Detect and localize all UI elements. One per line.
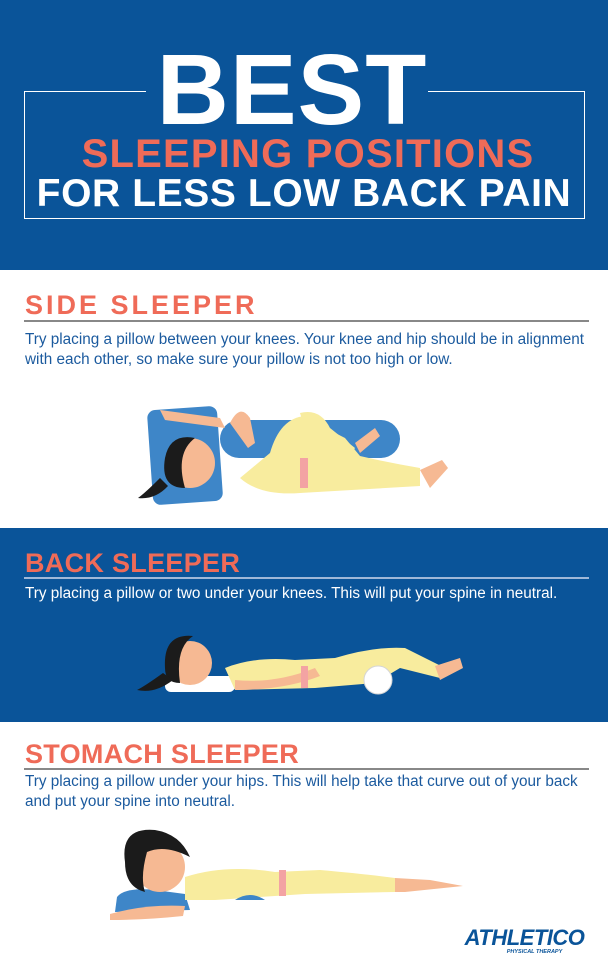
heading: stomach sleeper: STOMACH SLEEPER (25, 739, 299, 769)
text: stomach sleeper tip (25, 773, 578, 810)
panel: side sleeper (24, 290, 589, 505)
text: stomach sleeper tip: Try placing a pillow under your hips. This will help take that curve out of your back (25, 773, 578, 790)
text: back sleeper tip: Try placing a pillow or two under your knees. This will put your spine in neutral. (25, 585, 557, 602)
title: BEST: BEST (157, 34, 427, 146)
text: side sleeper tip: with each other, so make sure your pillow is not too high or low. (25, 350, 453, 368)
panel: back sleeper (0, 528, 608, 722)
illustration: stomach sleeper (110, 830, 462, 920)
text: stomach sleeper tip: and put your spine into neutral. (25, 792, 235, 810)
heading: side sleeper: SIDE SLEEPER (25, 290, 258, 320)
header frame (24, 91, 585, 219)
frame gap behind BEST (146, 85, 428, 97)
header panel (0, 0, 608, 270)
text: side sleeper tip (25, 331, 584, 368)
logo: athletico: ATHLETICO (465, 925, 584, 950)
illustration: back sleeper (137, 636, 463, 694)
heading: back sleeper: BACK SLEEPER (25, 548, 240, 578)
subtitle: for less low back pain: FOR LESS LOW BACK PAIN (37, 172, 571, 215)
logo: athletico: PHYSICAL THERAPY (507, 949, 562, 955)
panel: stomach sleeper (24, 739, 589, 955)
illustration: side sleeper (138, 406, 448, 505)
text: side sleeper tip: Try placing a pillow between your knees. Your knee and hip should be in alignment (25, 331, 584, 348)
subtitle: sleeping positions: SLEEPING POSITIONS (82, 132, 534, 176)
